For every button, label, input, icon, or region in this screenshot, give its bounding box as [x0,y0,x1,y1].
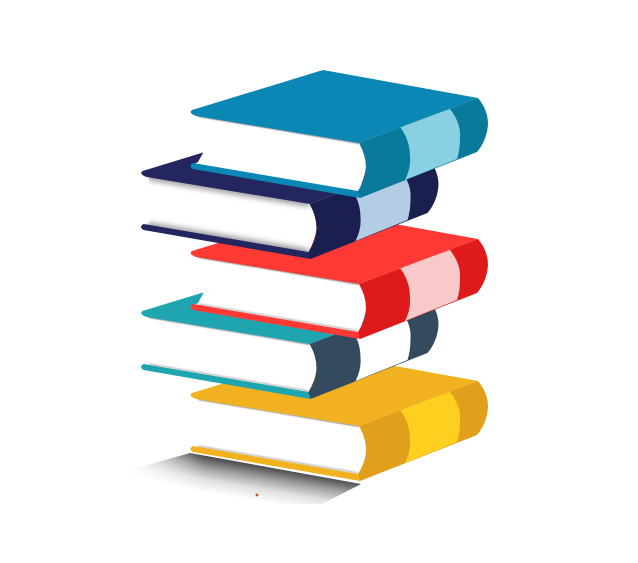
book: blue (top) [190,70,488,198]
illustration: stack of five books [141,70,488,504]
book: red [190,211,488,339]
book: navy [141,146,438,259]
ground shadow [120,450,361,506]
speck [256,494,258,496]
book: teal [141,286,438,399]
book: yellow (bottom) [190,353,488,481]
